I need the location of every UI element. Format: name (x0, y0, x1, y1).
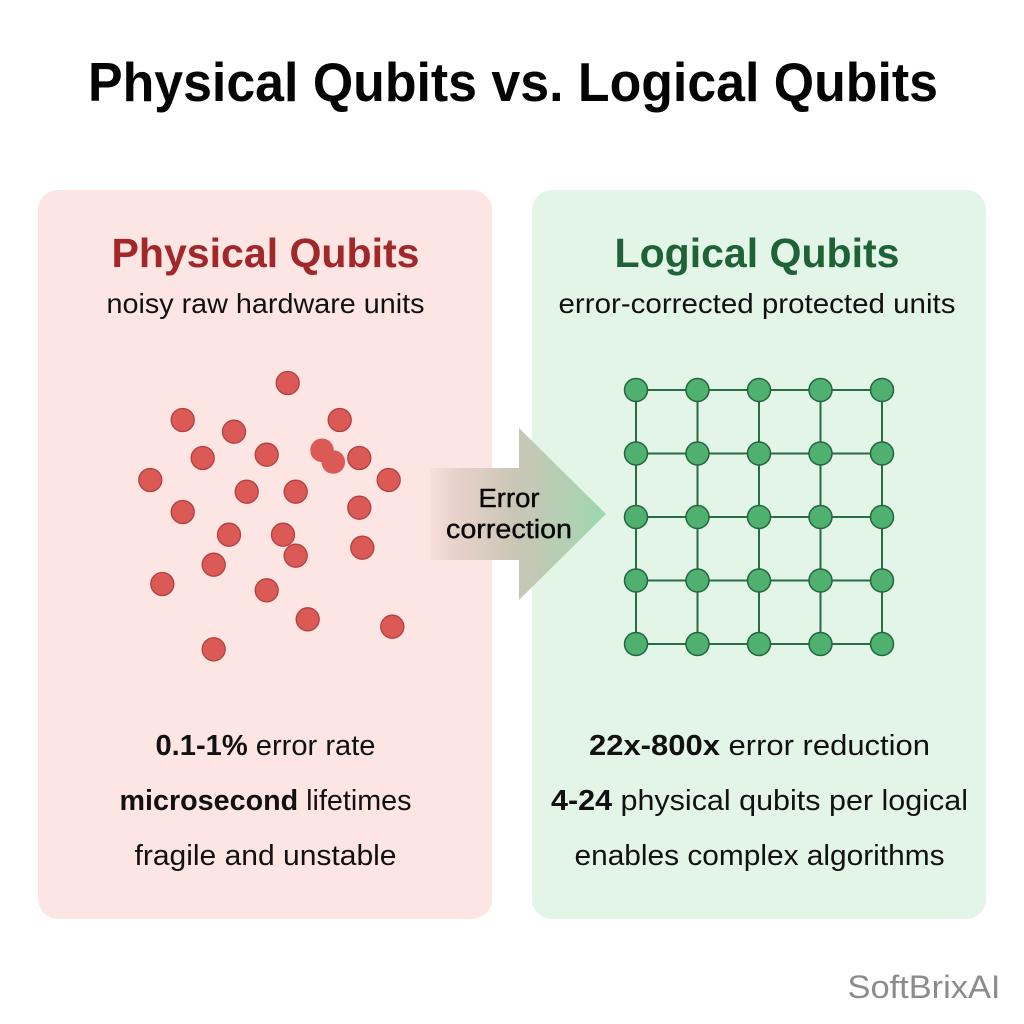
stat: error reduction: 22x-800x error reduction (589, 730, 930, 762)
stats: logical qubits (551, 730, 968, 872)
stat: error rate: 0.1-1% error rate (156, 730, 376, 762)
stats: physical qubits (120, 730, 412, 872)
subtitle: physical: noisy raw hardware units (106, 288, 424, 319)
heading: logical qubits: Logical Qubits (614, 230, 900, 276)
panel: physical qubits (38, 190, 492, 919)
arrow: error correction (430, 428, 606, 600)
stat: algorithms: enables complex algorithms (574, 840, 944, 872)
subtitle: logical: error-corrected protected units (558, 288, 956, 319)
watermark: SoftBrixAI (848, 969, 1000, 1005)
stat: physical per logical: 4-24 physical qubits per logical (551, 785, 968, 817)
stat: lifetimes: microsecond lifetimes (120, 785, 412, 817)
arrow label line two: correction (446, 516, 572, 544)
stat: fragile: fragile and unstable (134, 840, 396, 872)
panel background: physical (38, 190, 492, 919)
chart: scattered noisy qubits (139, 372, 404, 661)
chart: qubit lattice grid (624, 378, 894, 656)
panel background: logical (532, 190, 986, 919)
title: Physical Qubits vs. Logical Qubits (88, 51, 938, 113)
heading: physical qubits: Physical Qubits (112, 230, 419, 276)
arrow label: Error (478, 485, 540, 513)
arrow shape (430, 428, 606, 600)
panel: logical qubits (532, 190, 986, 919)
